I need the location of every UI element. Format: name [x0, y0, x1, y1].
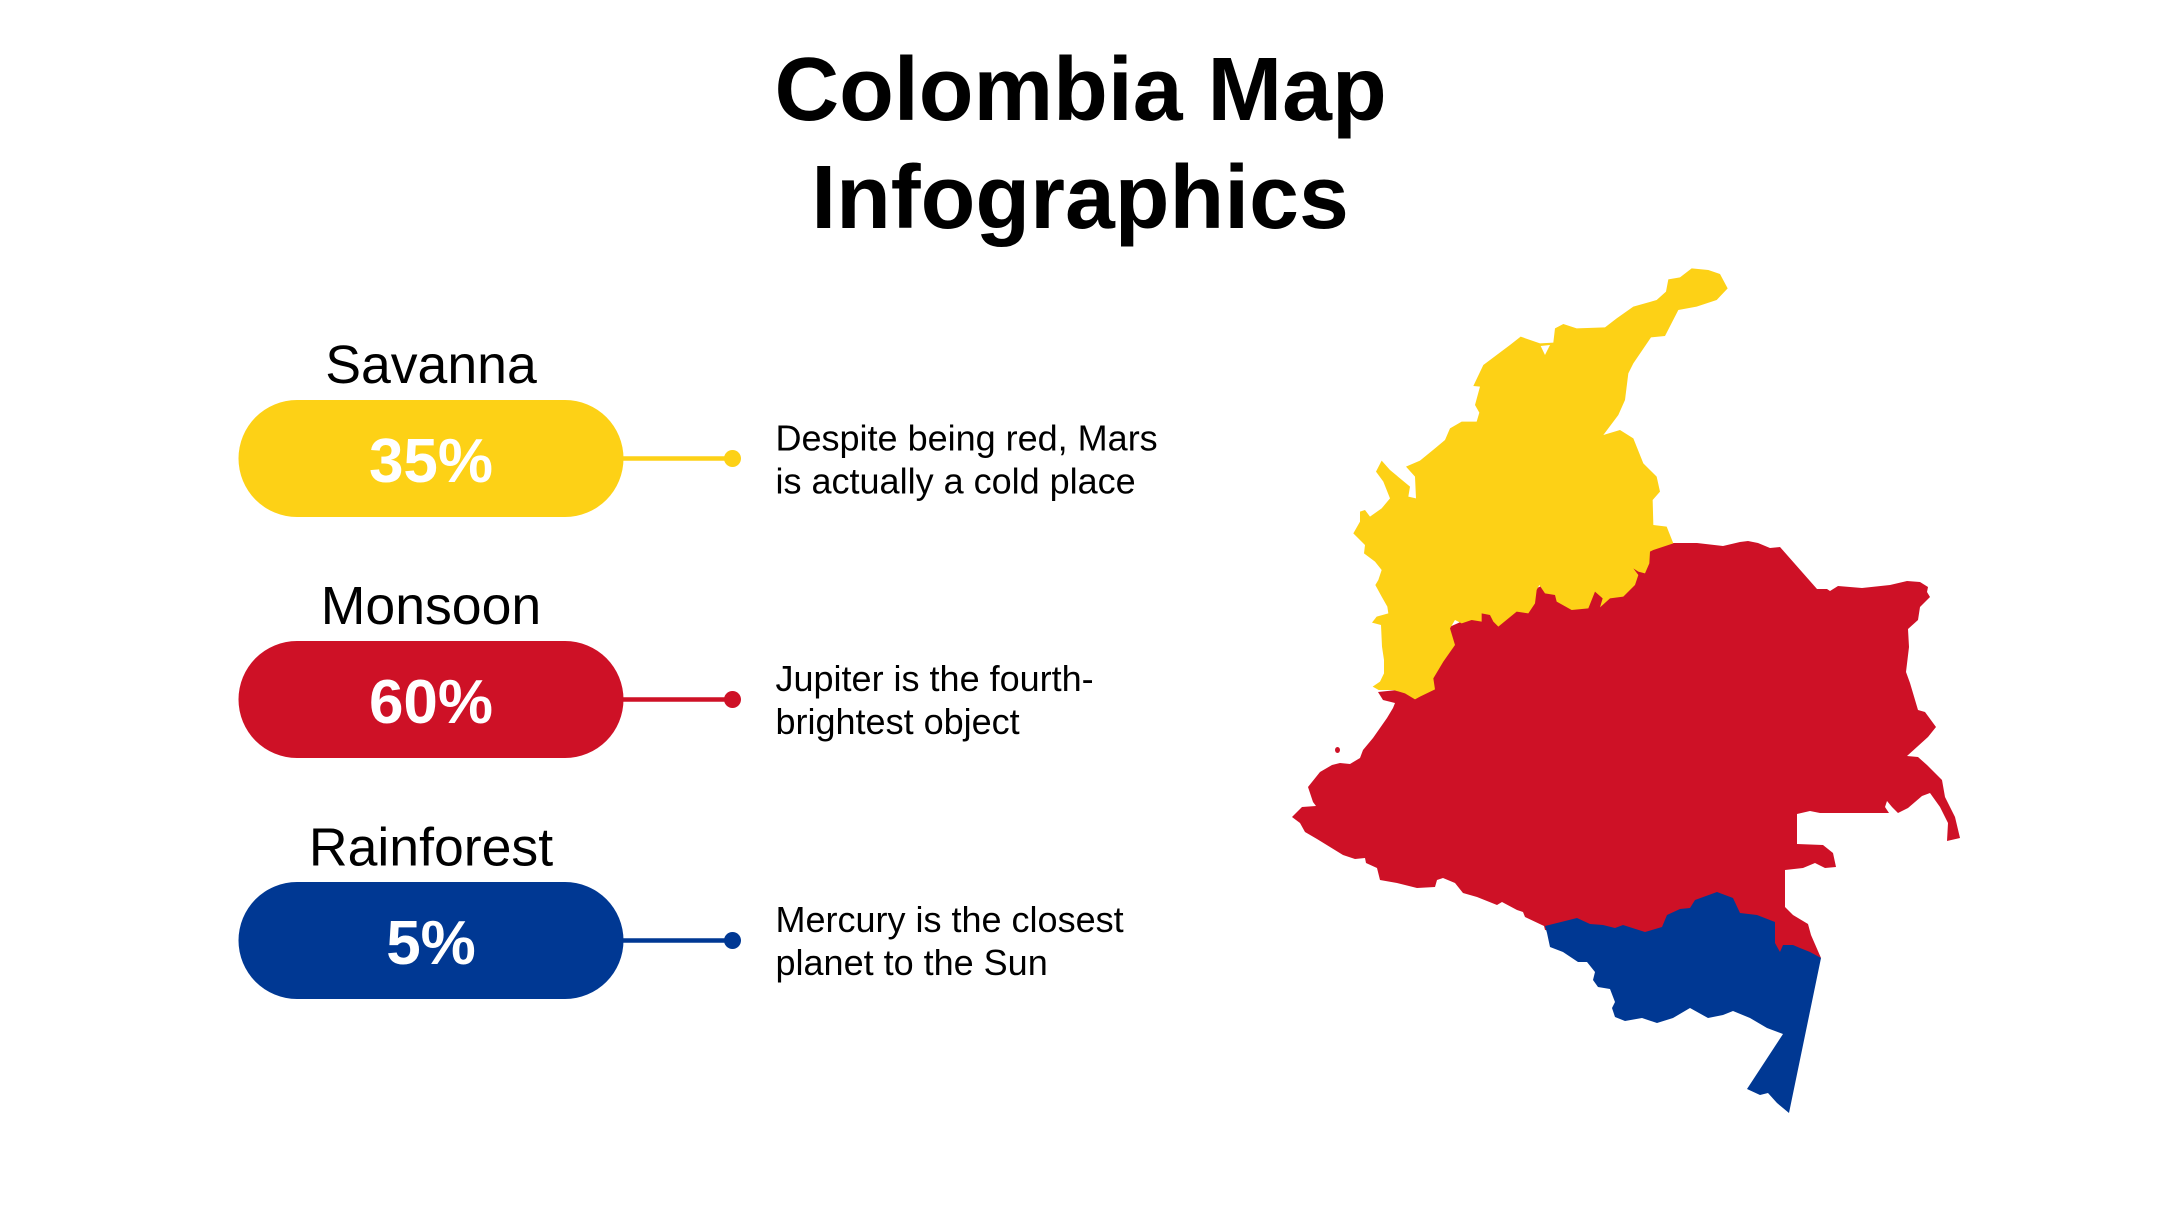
- panel: rainforest row: [238, 818, 1124, 999]
- text: rainforest description: [776, 899, 1124, 983]
- pill: rainforest 5%: 5%: [386, 909, 476, 978]
- map region: monsoon (red): [1292, 541, 1960, 958]
- map: Colombia: [1292, 268, 1960, 1113]
- text: monsoon description: Jupiter is the fourth-: [776, 658, 1094, 699]
- connector: rainforest: [620, 932, 741, 949]
- heading: savanna: Savanna: [325, 335, 537, 395]
- pill: monsoon 60%: [238, 641, 624, 758]
- heading: rainforest: Rainforest: [309, 818, 553, 878]
- connector: savanna: [620, 450, 741, 467]
- title: Colombia Map: [774, 39, 1387, 139]
- pill: rainforest 5%: [238, 882, 624, 999]
- text: rainforest description: Mercury is the closest: [776, 899, 1124, 940]
- pill: savanna 35%: 35%: [369, 427, 493, 496]
- map region: savanna (yellow): [1353, 268, 1728, 699]
- text: savanna description: Despite being red, Mars: [776, 418, 1158, 458]
- heading: monsoon: Monsoon: [321, 576, 541, 636]
- panel: savanna row: [238, 335, 1158, 517]
- text: monsoon description: [776, 658, 1094, 742]
- pill: monsoon 60%: 60%: [369, 668, 493, 737]
- text: monsoon description: brightest object: [776, 701, 1020, 742]
- map region: rainforest (blue): [1545, 892, 1821, 1113]
- text: savanna description: [776, 418, 1158, 502]
- text: rainforest description: planet to the Sun: [776, 942, 1048, 983]
- title: [774, 39, 1387, 247]
- text: savanna description: is actually a cold place: [776, 460, 1136, 502]
- title: Infographics: [811, 147, 1349, 247]
- panel: monsoon row: [238, 576, 1094, 758]
- pill: savanna 35%: [238, 400, 624, 517]
- connector: monsoon: [620, 691, 741, 708]
